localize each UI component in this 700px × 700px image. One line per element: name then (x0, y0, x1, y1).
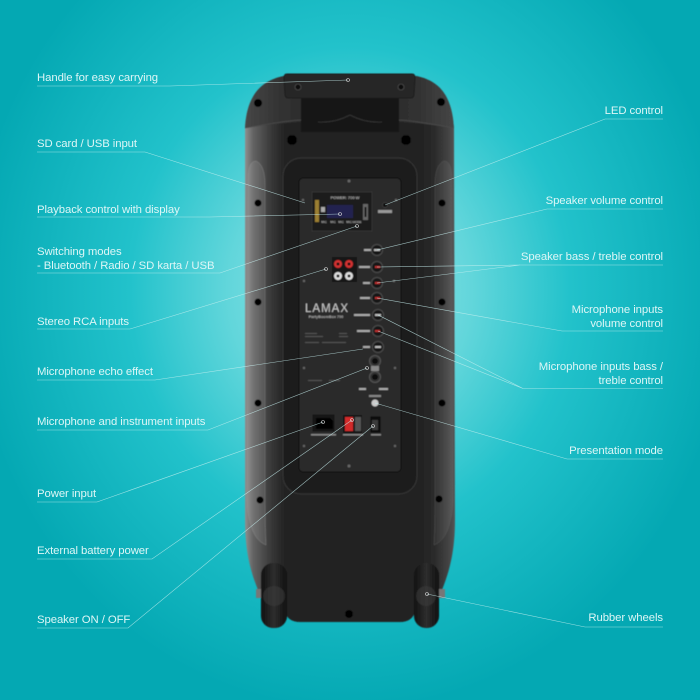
label: mic bass treble: treble control (599, 375, 663, 387)
label: power input: Power input (37, 488, 97, 500)
model name: PartyBoomBox 700 (309, 315, 343, 319)
label: rca: Stereo RCA inputs (37, 316, 129, 328)
knob markers (374, 249, 381, 348)
right wheel (414, 563, 445, 628)
label: led: LED control (605, 105, 663, 117)
label: bass treble: Speaker bass / treble control (521, 251, 663, 263)
label: wheels (426, 592, 663, 627)
label: switching modes (37, 224, 358, 273)
left wheel (256, 563, 287, 628)
label: handle (37, 72, 350, 86)
label: power input (37, 420, 324, 502)
handle plate (284, 74, 415, 98)
display module: MIC (321, 220, 328, 224)
label: mic bass treble: Microphone inputs bass / (539, 361, 664, 373)
label: instrument inputs (37, 366, 368, 430)
label: instrument inputs: Microphone and instrument inputs (37, 416, 206, 428)
label: bass treble (377, 251, 663, 283)
label: volume: Speaker volume control (546, 195, 663, 207)
control panel (299, 178, 401, 472)
label: presentation: Presentation mode (569, 445, 663, 457)
panel screws (302, 180, 397, 468)
power switch (370, 416, 381, 436)
label: mic volume: volume control (590, 318, 663, 330)
RCA inputs (332, 257, 357, 282)
handle screws (295, 84, 404, 90)
label: on off (37, 424, 374, 628)
label: handle: Handle for easy carrying (37, 72, 158, 84)
top shoulder shading (245, 76, 454, 128)
label: volume (377, 195, 663, 250)
jack inputs (370, 356, 380, 382)
recess around panel (283, 158, 417, 494)
label: wheels: Rubber wheels (588, 612, 663, 624)
display module: MODE (352, 220, 362, 224)
power socket (311, 414, 336, 436)
logo: LAMAX (305, 303, 349, 315)
label: sd card: SD card / USB input (37, 138, 138, 150)
label: mic volume: Microphone inputs (572, 304, 663, 316)
speaker body (245, 76, 455, 622)
presentation switch (359, 388, 388, 406)
holes (254, 98, 446, 618)
spec text (305, 333, 348, 381)
side highlights (247, 161, 266, 545)
label: playback: Playback control with display (37, 204, 180, 216)
label: rca (37, 268, 328, 329)
label: mic volume (377, 298, 663, 331)
label: playback (37, 204, 342, 217)
knob labels (354, 249, 371, 348)
label: led (385, 105, 663, 205)
display module: MIC (346, 220, 353, 224)
label: mic bass treble (378, 315, 664, 388)
handle recess (301, 97, 399, 132)
label: echo (37, 349, 363, 380)
label: battery (37, 418, 354, 559)
label: switching modes: - Bluetooth / Radio / SD karta / USB (37, 260, 214, 272)
display module: MIC (330, 220, 337, 224)
label: battery: External battery power (37, 545, 149, 557)
display module: MIC (338, 220, 345, 224)
label: sd card (37, 138, 305, 203)
label: presentation (375, 403, 663, 459)
knobs (372, 244, 384, 352)
LED control button (378, 202, 392, 213)
label: switching modes: Switching modes (37, 246, 122, 258)
label: on off: Speaker ON / OFF (37, 614, 130, 626)
speaker terminal (343, 415, 363, 436)
display module: POWER: 700 W (331, 195, 360, 200)
speaker (245, 74, 455, 628)
label: echo: Microphone echo effect (37, 366, 154, 378)
display module (312, 192, 372, 231)
